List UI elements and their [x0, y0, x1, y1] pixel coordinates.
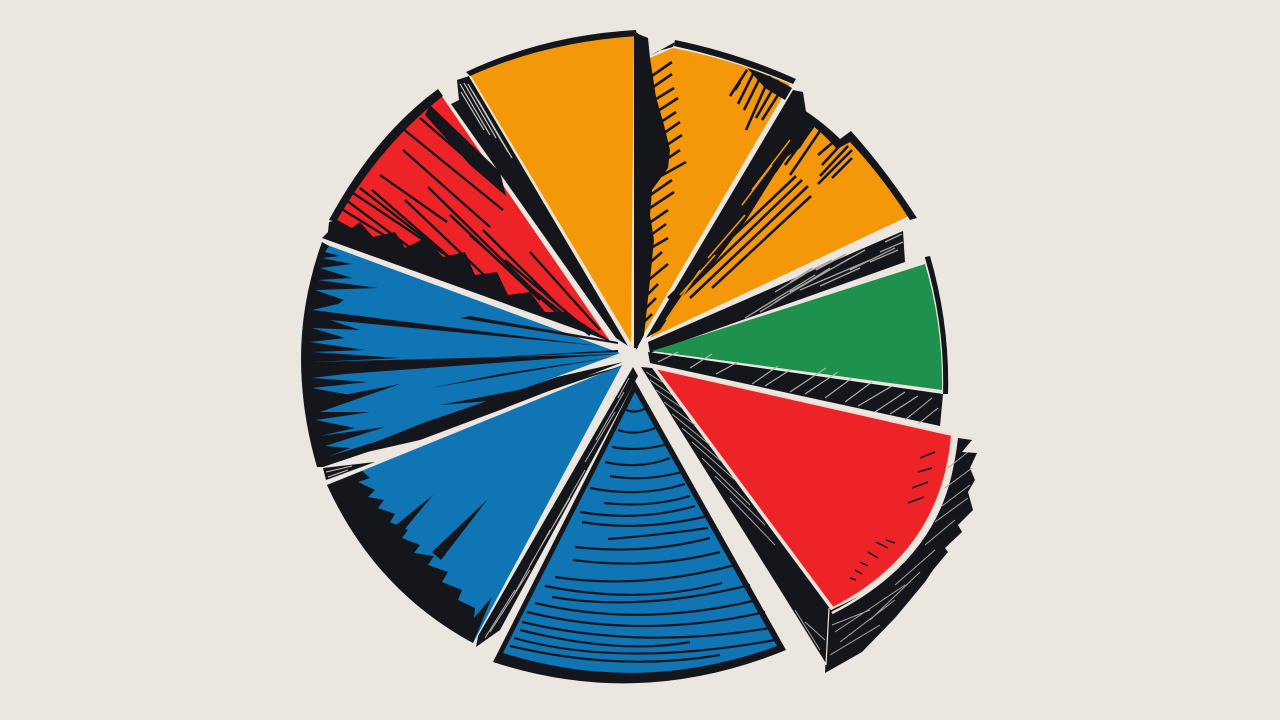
slice: orange top left	[466, 30, 638, 348]
hatching: lower right gap	[648, 352, 943, 426]
hatching: gap between red and orange slices	[451, 76, 628, 346]
slice: orange top centre	[636, 33, 796, 350]
pie chart	[300, 30, 977, 683]
hatching: lower centre left gap	[476, 367, 638, 647]
slice: blue left	[300, 242, 623, 467]
slice: red right	[655, 368, 952, 608]
slice: red upper left	[322, 89, 612, 342]
hatching: outer shadow of red slice	[825, 438, 977, 673]
slice: green	[652, 256, 948, 394]
hatching: lower centre right gap	[641, 367, 831, 665]
hatching: upper right gap	[648, 231, 905, 353]
slice: blue bottom	[493, 381, 786, 683]
slice: blue lower left	[323, 365, 622, 643]
slice: orange upper right	[646, 90, 917, 338]
